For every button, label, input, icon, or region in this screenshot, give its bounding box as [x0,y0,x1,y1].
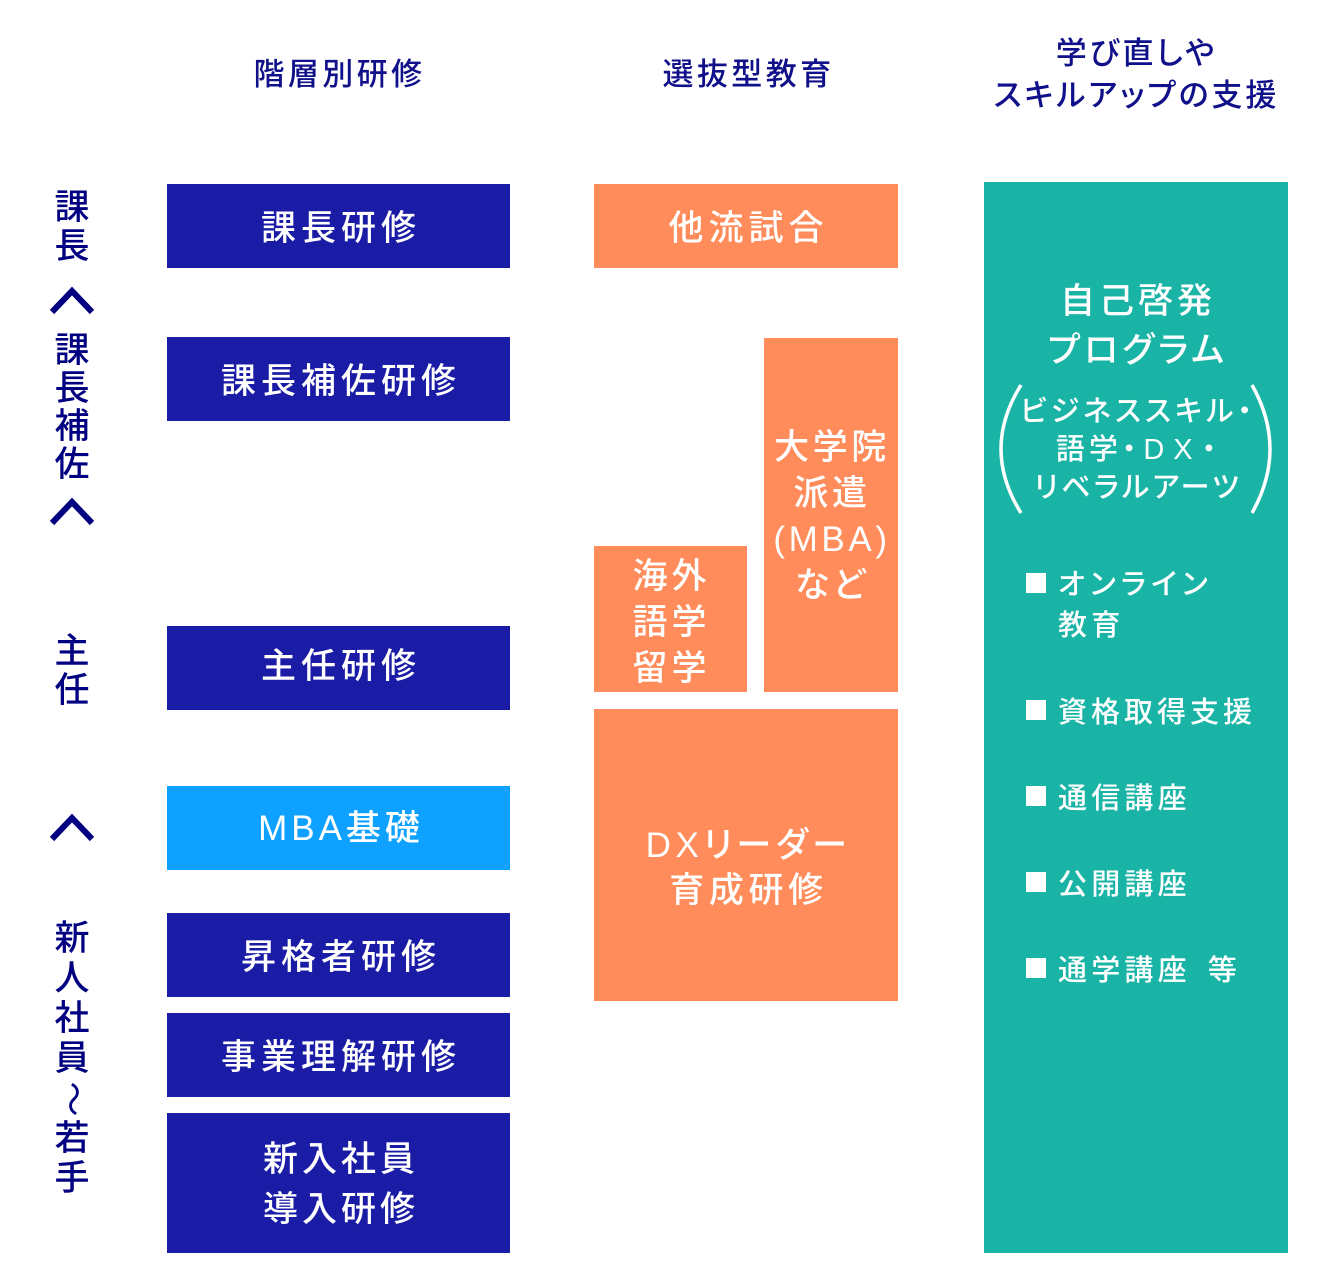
box: 大学院派遣(MBA)など: (MBA) [773,520,891,559]
level label: 新人社員〜若手: 新 [54,919,90,958]
list item: オンライン教育 [1058,569,1213,642]
heading: 学び直しやスキルアップの支援 [994,36,1279,113]
box: 課長補佐研修 [167,337,510,421]
bullet: 資格取得支援 [1026,700,1046,720]
heading: 階層別研修: 階層別研修 [254,57,426,92]
box: 他流試合 [594,184,898,268]
box: 新入社員導入研修: 導入研修 [263,1190,419,1229]
panel: 自己啓発プログラム [984,182,1288,1253]
box: 海外語学留学: 海外 [632,556,710,596]
box: 主任研修: 主任研修 [261,647,421,686]
level label: 課長: 長 [54,227,90,266]
level label: 課長補佐: 補 [54,407,90,446]
level label: 新人社員〜若手: 人 [54,959,90,998]
box: 課長研修: 課長研修 [261,209,421,248]
level label: 新人社員〜若手 [53,919,92,1198]
list item: 公開講座: 公開講座 [1058,869,1191,901]
box: DXリーダー育成研修 [594,709,898,1001]
level label: 新人社員〜若手: 手 [54,1159,90,1198]
left bracket [999,384,1022,514]
heading: 学び直しやスキルアップの支援: 学び直しや [1056,36,1217,71]
level label: 課長補佐 [54,331,90,484]
right bracket [1250,384,1272,514]
level label: 主任 [54,632,90,710]
level label: 課長 [54,188,90,266]
list item: 通学講座 等: 通学講座 等 [1058,955,1241,987]
box: 海外語学留学: 語学 [632,602,710,642]
bullet: 公開講座 [1026,872,1046,892]
box: 課長補佐研修: 課長補佐研修 [221,362,461,401]
level label: 課長補佐: 長 [54,369,90,408]
box: 大学院派遣(MBA)など: 大学院 [774,428,890,467]
box: 大学院派遣(MBA)など [764,338,898,692]
arrow: 課長補佐 to 課長 [50,286,94,314]
level label: 新人社員〜若手: 社 [54,999,90,1038]
heading: 学び直しやスキルアップの支援: スキルアップの支援 [994,78,1279,113]
level label: 新人社員〜若手: 〜 [53,1081,92,1117]
box: 主任研修 [167,626,510,710]
arrow: 新人社員 to 主任 [50,814,94,842]
box: 昇格者研修: 昇格者研修 [241,938,441,977]
level label: 主任: 任 [54,671,90,710]
level label: 課長: 課 [54,188,90,227]
panel title: 自己啓発プログラム: プログラム [1048,331,1228,370]
box: 課長研修 [167,184,510,268]
program topics [1020,396,1256,504]
level label: 課長補佐: 課 [54,331,90,370]
list item: オンライン教育: 教育 [1058,610,1124,642]
box: 昇格者研修 [167,913,510,997]
box: DXリーダー育成研修: DXリーダー [646,826,851,865]
list item: 通信講座: 通信講座 [1058,783,1191,815]
box: 大学院派遣(MBA)など: など [795,566,869,605]
box: 他流試合: 他流試合 [668,209,828,248]
bullet: 通信講座 [1026,786,1046,806]
bullet: 通学講座 等 [1026,958,1046,978]
panel title: 自己啓発プログラム: 自己啓発 [1060,282,1216,321]
list item: 資格取得支援: 資格取得支援 [1058,697,1256,729]
heading: 選抜型教育: 選抜型教育 [662,57,834,92]
box: MBA基礎: MBA基礎 [258,809,424,848]
box: 事業理解研修 [167,1013,510,1097]
box: 大学院派遣(MBA)など: 派遣 [793,474,871,513]
box: MBA基礎 [167,786,510,870]
list item: オンライン教育: オンライン [1058,569,1213,601]
bullet: オンライン教育 [1026,573,1046,593]
program topics: 語学・DX・ [1056,434,1220,466]
box: DXリーダー育成研修: 育成研修 [669,871,828,910]
level label: 新人社員〜若手: 員 [54,1039,90,1078]
level label: 新人社員〜若手: 若 [54,1119,90,1158]
arrow: 主任 to 課長補佐 [50,498,94,526]
box: 海外語学留学: 留学 [632,648,710,688]
level label: 課長補佐: 佐 [54,445,90,484]
level label: 主任: 主 [54,632,90,671]
panel title: 自己啓発プログラム [1048,282,1228,370]
box: 海外語学留学 [594,546,747,692]
program topics: ビジネススキル・ [1020,396,1256,428]
program topics: リベラルアーツ [1034,472,1242,504]
box: 事業理解研修: 事業理解研修 [221,1038,461,1077]
box: 新入社員導入研修 [167,1113,510,1253]
box: 新入社員導入研修: 新入社員 [263,1140,419,1179]
